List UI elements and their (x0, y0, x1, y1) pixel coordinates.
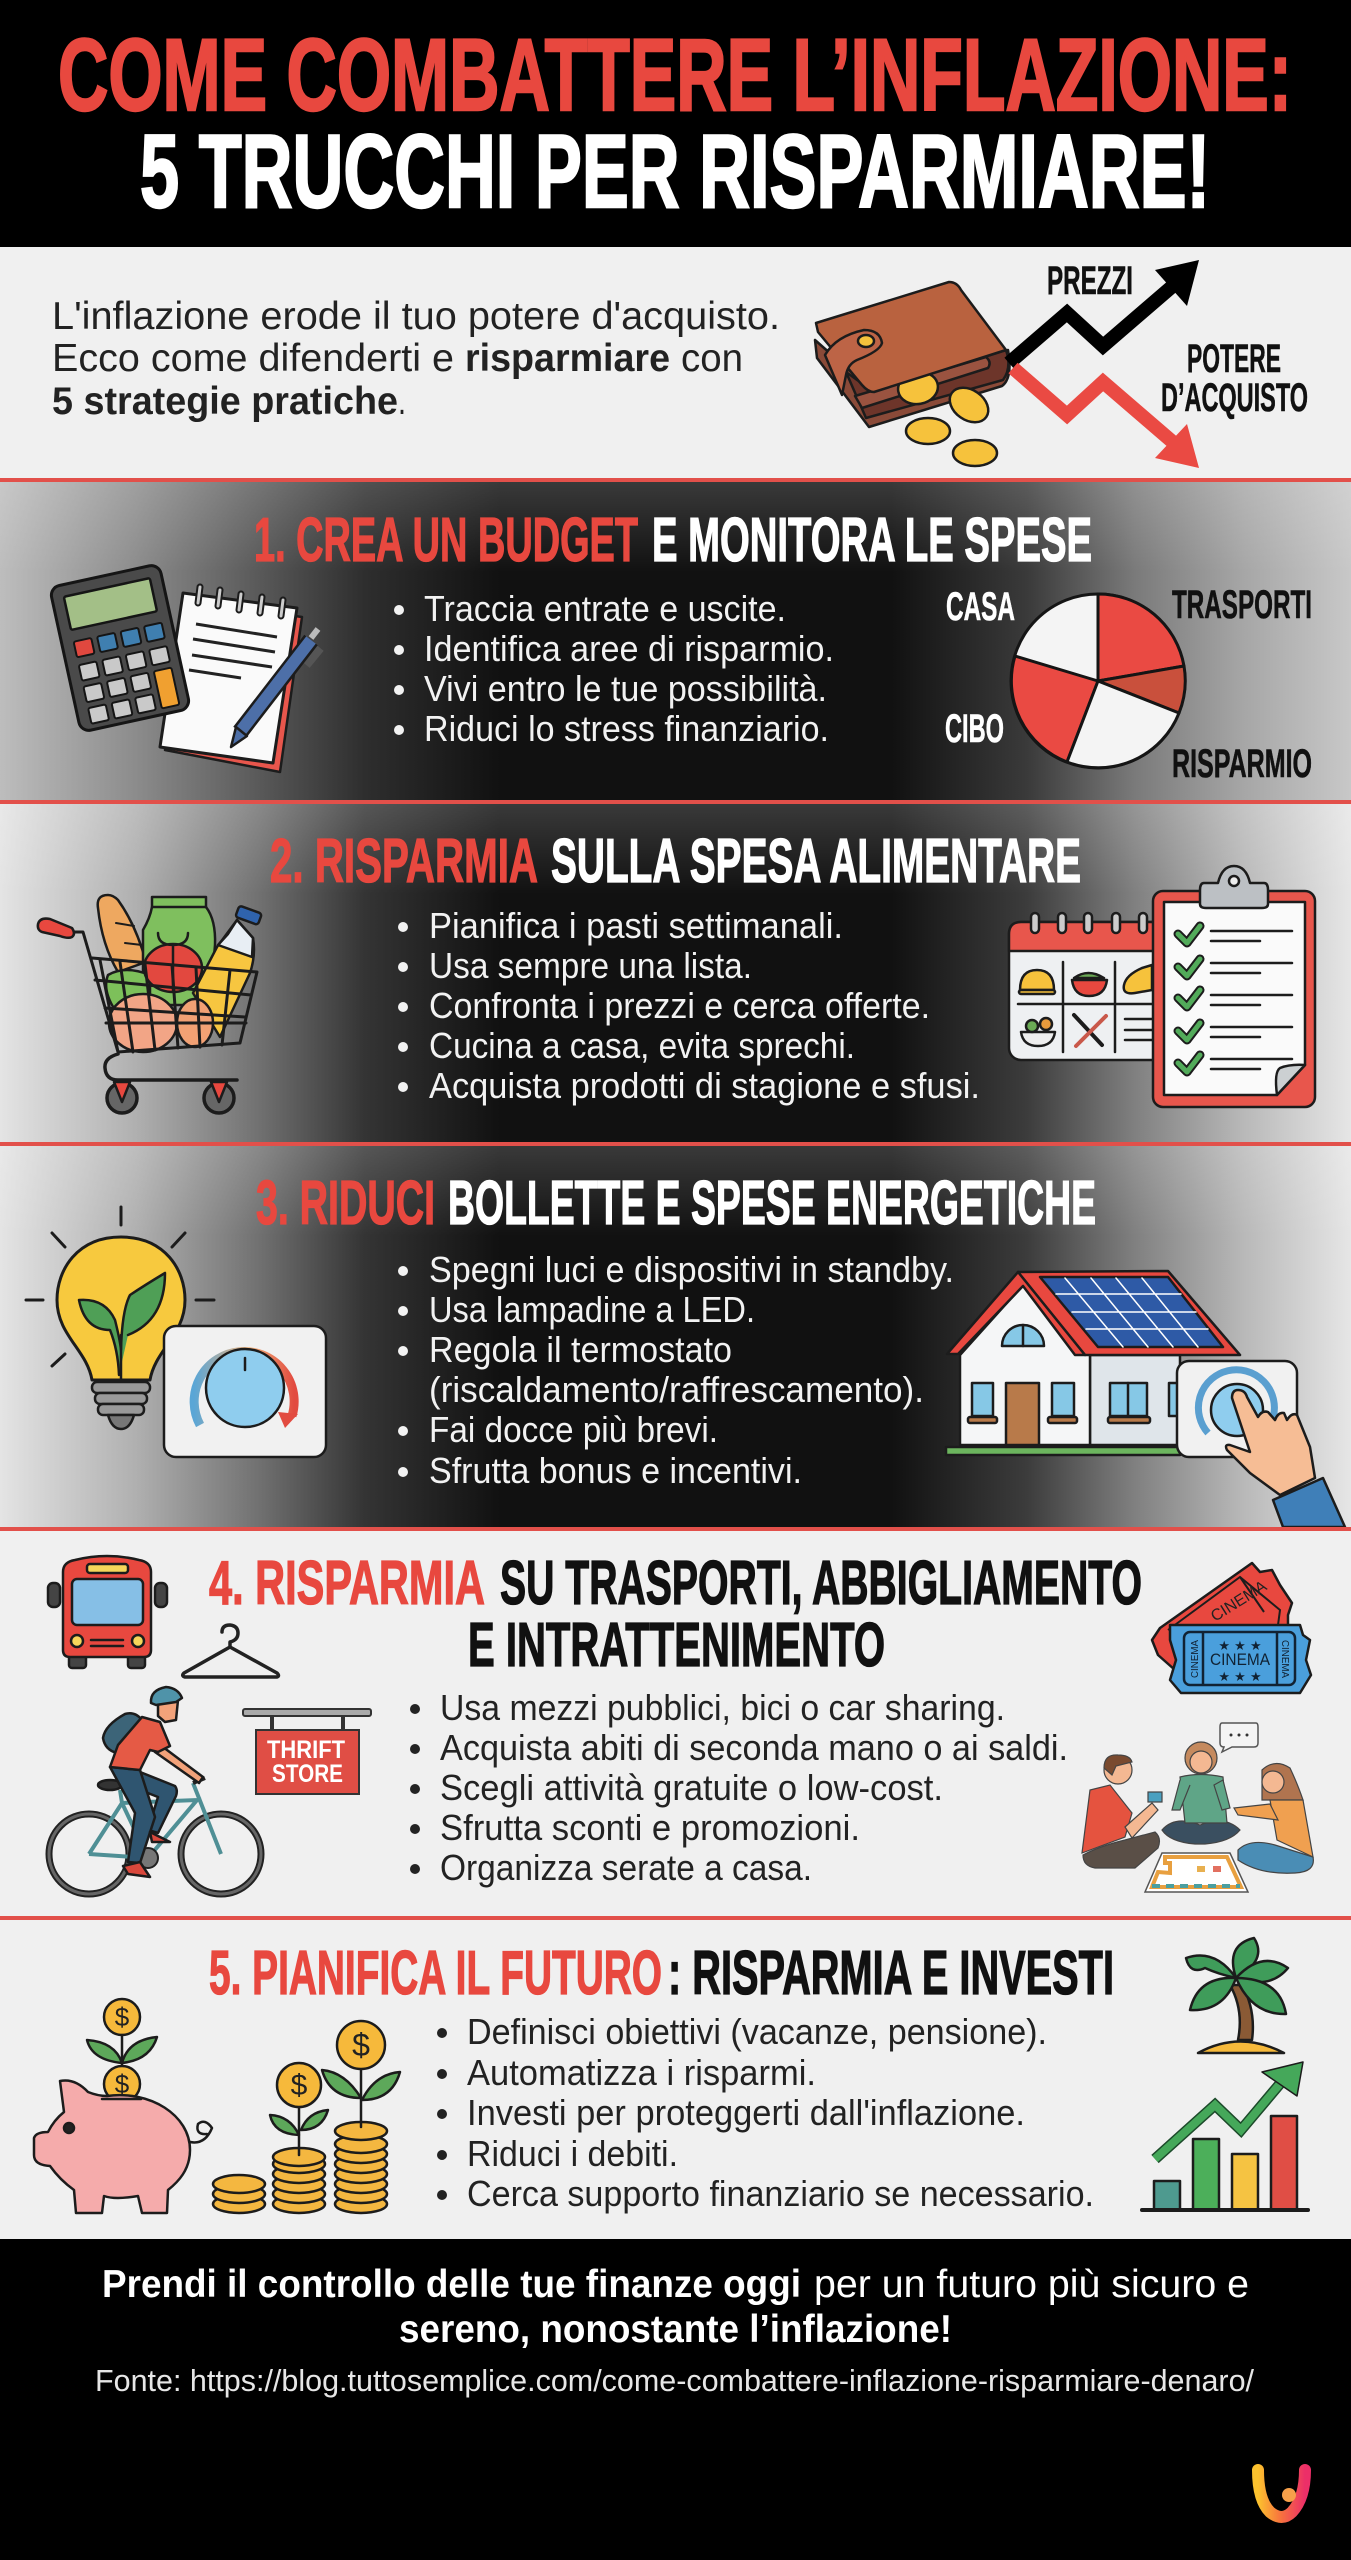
icon: friends playing board game (1082, 1723, 1313, 1892)
bullets 5 (437, 2011, 1094, 2214)
bullets 1: Riduci lo stress finanziario. (424, 708, 829, 749)
icon: bus (48, 1556, 167, 1668)
panel: footer (0, 2239, 1351, 2560)
bullets 1: Identifica aree di risparmio. (424, 628, 834, 669)
labels: prezzi, potere d'acquisto (1047, 259, 1308, 420)
intro text: risparmiare (465, 337, 670, 380)
icon: piggy bank with growing coin (34, 1999, 212, 2213)
heading 4 (209, 1549, 1142, 1680)
icon: cinema tickets: CINEMA (1210, 1650, 1271, 1669)
bullets 3: Fai docce più brevi. (429, 1409, 718, 1450)
intro text: . (398, 380, 406, 423)
icon: cyclist (49, 1687, 261, 1894)
heading 2 (270, 827, 1081, 896)
closing statement: sereno, nonostante l’inflazione! (399, 2308, 952, 2351)
bullets 1 (394, 588, 834, 749)
pie labels: CIBO (945, 707, 1004, 751)
pie labels: CASA (946, 585, 1015, 629)
chart: growth bars and arrow (1142, 2062, 1308, 2210)
arrow: prices up (1009, 260, 1199, 363)
bullets 3: Regola il termostato (429, 1329, 732, 1370)
panel: section 3 energy (0, 1146, 1351, 1527)
intro text (52, 295, 780, 423)
bullets 4: Organizza serate a casa. (440, 1847, 812, 1888)
bullets 4: Usa mezzi pubblici, bici o car sharing. (440, 1687, 1005, 1728)
bullets 3: (riscaldamento/raffrescamento). (429, 1369, 924, 1410)
icon: coin stacks with plants: $ (352, 2027, 370, 2063)
panel: section 5 future (0, 1920, 1351, 2239)
icon: shopping cart with food (38, 895, 262, 1113)
bullets 2: Confronta i prezzi e cerca offerte. (429, 985, 930, 1026)
bullets 2: Pianifica i pasti settimanali. (429, 905, 843, 946)
heading 1: 1. CREA UN BUDGET (254, 506, 638, 575)
bullets 5: Cerca supporto finanziario se necessario. (467, 2173, 1094, 2214)
source line: Fonte: https://blog.tuttosemplice.com/come-combattere-inflazione-risparmiare-denaro/ (95, 2363, 1254, 2398)
icon: light bulb with leaves (26, 1207, 214, 1429)
icon: cinema tickets: CINEMA (1190, 1640, 1201, 1678)
icon: cinema tickets: ★ ★ ★ (1218, 1670, 1262, 1685)
heading 5: : RISPARMIA E INVESTI (668, 1939, 1114, 2008)
bullets 2: Acquista prodotti di stagione e sfusi. (429, 1065, 980, 1106)
bullets 2 (398, 905, 980, 1106)
intro text: 5 strategie pratiche (52, 380, 398, 423)
panel: section 4 transport, clothing, entertainment (0, 1531, 1351, 1916)
icon: cinema tickets: ★ ★ ★ (1218, 1639, 1262, 1654)
bullets 4 (410, 1687, 1068, 1888)
icon: hanger (183, 1625, 278, 1677)
bullets 5: Automatizza i risparmi. (467, 2052, 816, 2093)
arrow: purchasing power down (1013, 368, 1199, 468)
icon: piggy bank with growing coin: $ (115, 2069, 130, 2099)
closing statement: per un futuro più sicuro e (814, 2263, 1249, 2306)
icon: cinema tickets: CINEMA (1279, 1640, 1290, 1678)
panel: section 1 budget (0, 482, 1351, 800)
bullets 3: Sfrutta bonus e incentivi. (429, 1450, 802, 1491)
icon: house with solar panels (946, 1271, 1240, 1455)
bullets 5: Riduci i debiti. (467, 2133, 678, 2174)
icon: coin stacks with plants (213, 2021, 400, 2213)
icon: thrift store sign: THRIFT (267, 1736, 345, 1764)
closing statement: Prendi il controllo delle tue finanze oggi (102, 2263, 801, 2306)
icon: wallet with coins (815, 282, 1010, 466)
icon: piggy bank with growing coin: $ (115, 2002, 130, 2032)
bullets 3 (398, 1249, 954, 1491)
icon: checklist clipboard (1153, 866, 1315, 1107)
heading 5: 5. PIANIFICA IL FUTURO (209, 1939, 662, 2008)
icon: calculator (50, 564, 190, 732)
chart: expense pie (1011, 594, 1185, 768)
icon: cinema tickets (1152, 1563, 1311, 1693)
bullets 5: Investi per proteggerti dall'inflazione. (467, 2092, 1025, 2133)
icon: meal calendar (1009, 913, 1169, 1060)
panel: intro (0, 247, 1351, 478)
heading 1: E MONITORA LE SPESE (652, 506, 1092, 575)
labels: prezzi, potere d'acquisto: POTERE (1187, 337, 1281, 381)
bullets 4: Sfrutta sconti e promozioni. (440, 1807, 860, 1848)
icon: cinema tickets: CINEMA (1208, 1578, 1270, 1625)
header: title band (0, 0, 1351, 247)
heading 3 (256, 1169, 1096, 1238)
bullets 2: Cucina a casa, evita sprechi. (429, 1025, 855, 1066)
bullets 1: Vivi entro le tue possibilità. (424, 668, 827, 709)
heading 3: 3. RIDUCI (256, 1169, 435, 1238)
closing statement (102, 2263, 1249, 2351)
heading 2: 2. RISPARMIA (270, 827, 538, 896)
icon: thrift store sign: STORE (272, 1760, 343, 1788)
intro text: con (681, 337, 743, 380)
logo (1258, 2470, 1305, 2517)
bullets 2: Usa sempre una lista. (429, 945, 752, 986)
bullets 4: Scegli attività gratuite o low-cost. (440, 1767, 943, 1808)
heading 4: 4. RISPARMIA (209, 1549, 485, 1618)
icon: hand pressing dial (1177, 1361, 1345, 1527)
bullets 3: Spegni luci e dispositivi in standby. (429, 1249, 954, 1290)
bullets 4: Acquista abiti di seconda mano o ai saldi. (440, 1727, 1068, 1768)
icon: notepad and pen (160, 587, 319, 772)
icon: coin stacks with plants: $ (291, 2069, 308, 2102)
icon: thrift store sign (243, 1709, 371, 1794)
intro text: Ecco come difenderti e (52, 337, 454, 380)
icon: palm tree (1186, 1938, 1288, 2053)
bullets 3: Usa lampadine a LED. (429, 1289, 755, 1330)
icon: thermostat (164, 1326, 326, 1457)
heading 4: E INTRATTENIMENTO (468, 1611, 885, 1680)
intro text: L'inflazione erode il tuo potere d'acquisto. (52, 295, 780, 338)
labels: prezzi, potere d'acquisto: PREZZI (1047, 259, 1133, 303)
pie labels (945, 583, 1312, 786)
panel: section 2 groceries (0, 804, 1351, 1142)
bullets 1: Traccia entrate e uscite. (424, 588, 786, 629)
bullets 5: Definisci obiettivi (vacanze, pensione). (467, 2011, 1047, 2052)
